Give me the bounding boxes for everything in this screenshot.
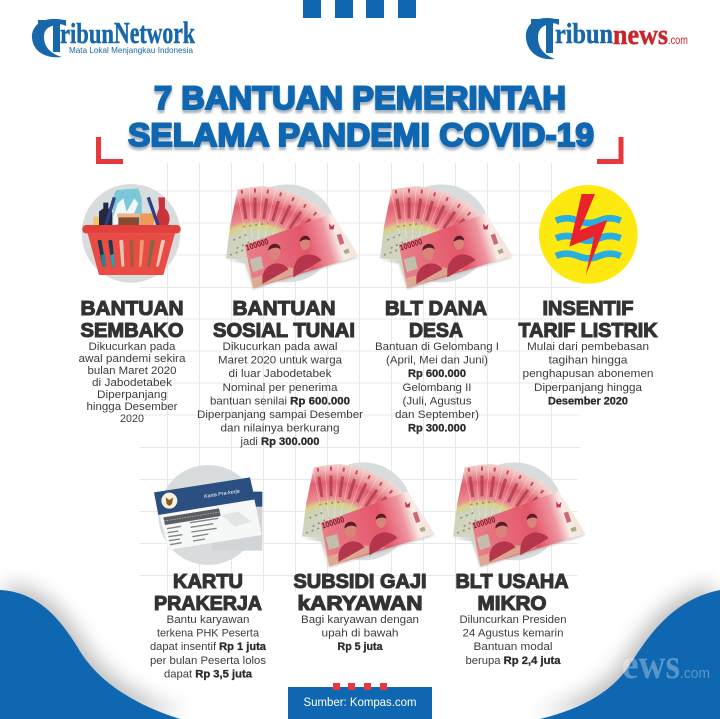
red bracket left: [98, 137, 123, 162]
text block: berupa Rp 2,4 juta: [466, 655, 561, 667]
text block: Mulai dari pembebasan: [527, 341, 649, 353]
icon: PLN lightning logo: [539, 185, 638, 284]
panel: insentif tarif listrik: [518, 185, 658, 407]
text block: dan September): [395, 409, 479, 421]
icon: pre-work card: [154, 465, 262, 565]
heading: INSENTIF: [542, 298, 634, 320]
text block: jadi Rp 300.000: [239, 436, 320, 448]
panel: subsidi gaji karyawan: [294, 462, 434, 653]
grid background: [140, 163, 580, 592]
watermark: ews: [622, 642, 680, 688]
panel: blt dana desa: [375, 184, 512, 435]
heading: SUBSIDI GAJI: [294, 571, 426, 593]
text block: dapat insentif Rp 1 juta: [150, 641, 267, 653]
text block: (April, Mei dan Juni): [386, 355, 488, 367]
heading: BLT DANA: [385, 298, 487, 320]
text block: 24 Agustus kemarin: [462, 628, 564, 640]
text block: Nominal per penerima: [222, 382, 338, 394]
icon: banknotes: [380, 184, 512, 289]
panel: bantuan sembako: [78, 184, 186, 425]
text block: [197, 341, 363, 448]
text block: [301, 614, 419, 653]
logo: Tribunnews.com: news: [613, 19, 668, 51]
red bracket right: [597, 137, 621, 162]
heading: [154, 571, 262, 615]
heading: [518, 298, 658, 342]
heading: SEMBAKO: [80, 320, 184, 342]
source box: [288, 683, 432, 719]
heading: [385, 298, 487, 342]
heading: [80, 298, 184, 342]
icon: grocery basket: [82, 184, 181, 283]
heading: DESA: [409, 320, 463, 342]
heading: PRAKERJA: [154, 593, 262, 615]
heading: [294, 571, 426, 615]
top decorative blue bars: [303, 0, 416, 18]
text block: Bagi karyawan dengan: [301, 614, 419, 626]
source box: Sumber: Kompas.com: [304, 697, 416, 709]
text block: Bantuan di Gelombang I: [375, 341, 499, 353]
logo: Tribunnews.com: [526, 18, 688, 59]
title: 7 BANTUAN PEMERINTAH: [154, 80, 566, 116]
logo: Tribunnews.com: ribun: [555, 19, 613, 50]
text block: [375, 341, 499, 435]
text block: Gelombang II: [402, 382, 472, 394]
text block: awal pandemi sekira: [78, 353, 186, 365]
text block: 2020: [120, 413, 144, 425]
text block: Diperpanjang hingga: [534, 382, 643, 394]
text block: dan nilainya berkurang: [220, 423, 340, 435]
text block: tagihan hingga: [548, 355, 628, 367]
text block: Rp 300.000: [408, 423, 466, 435]
icon: banknotes: [302, 462, 434, 567]
text block: Dikucurkan pada: [88, 341, 176, 353]
icon: banknotes: [226, 184, 358, 289]
text block: upah di bawah: [322, 628, 398, 640]
text block: Diperpanjang sampai Desember: [197, 409, 363, 421]
heading: BANTUAN: [80, 298, 184, 320]
text block: [460, 614, 566, 667]
text block: [78, 341, 186, 425]
watermark: .com: [680, 665, 710, 682]
text block: Maret 2020 untuk warga: [218, 355, 343, 367]
text block: di Jabodetabek: [92, 377, 173, 389]
text block: Bantu karyawan: [166, 614, 250, 626]
icon: pre-work card: Karta Pra-kerja: [204, 488, 240, 500]
text block: (Juli, Agustus: [402, 395, 472, 407]
panel: kartu prakerja: [150, 465, 267, 680]
text block: terkena PHK Peserta: [157, 628, 260, 640]
panel: bantuan sosial tunai: [197, 184, 363, 448]
heading: MIKRO: [478, 593, 546, 615]
title: [128, 80, 594, 153]
text block: Diluncurkan Presiden: [460, 614, 566, 626]
heading: SOSIAL TUNAI: [213, 320, 355, 342]
text block: Rp 5 juta: [338, 641, 383, 653]
text block: bulan Maret 2020: [88, 365, 176, 377]
text block: Dikucurkan pada awal: [222, 341, 338, 353]
bottom-left blue wave: [0, 584, 186, 719]
text block: per bulan Peserta lolos: [150, 655, 267, 667]
heading: [213, 298, 355, 342]
text block: di luar Jabodetabek: [228, 368, 332, 380]
heading: BLT USAHA: [456, 571, 568, 593]
icon: banknotes: [453, 462, 585, 567]
heading: BANTUAN: [232, 298, 336, 320]
text block: bantuan senilai Rp 600.000: [210, 395, 350, 407]
text block: dapat Rp 3,5 juta: [164, 668, 253, 680]
heading: [456, 571, 568, 615]
heading: TARIF LISTRIK: [518, 320, 658, 342]
text block: [522, 341, 654, 407]
text block: hingga Desember: [86, 401, 178, 413]
logo: Tribun Network: Mata Lokal Menjangkau Indonesia: [69, 45, 193, 55]
text block: Diperpanjang: [97, 389, 167, 401]
heading: KARTU: [173, 571, 243, 593]
text block: [150, 614, 267, 680]
logo: Tribun Network: ribun: [60, 19, 114, 50]
text block: penghapusan abonemen: [522, 368, 654, 380]
text block: Desember 2020: [548, 395, 628, 407]
text block: Rp 600.000: [408, 368, 466, 380]
logo: Tribun Network: Network: [114, 15, 196, 50]
text block: Bantuan modal: [474, 641, 552, 653]
logo: Tribun Network: [32, 15, 196, 57]
logo: Tribunnews.com: .com: [668, 33, 688, 47]
title: SELAMA PANDEMI COVID-19: [128, 117, 594, 153]
panel: blt usaha mikro: [453, 462, 585, 667]
heading: kARYAWAN: [298, 593, 422, 615]
bottom-right blue wave: [534, 584, 720, 719]
